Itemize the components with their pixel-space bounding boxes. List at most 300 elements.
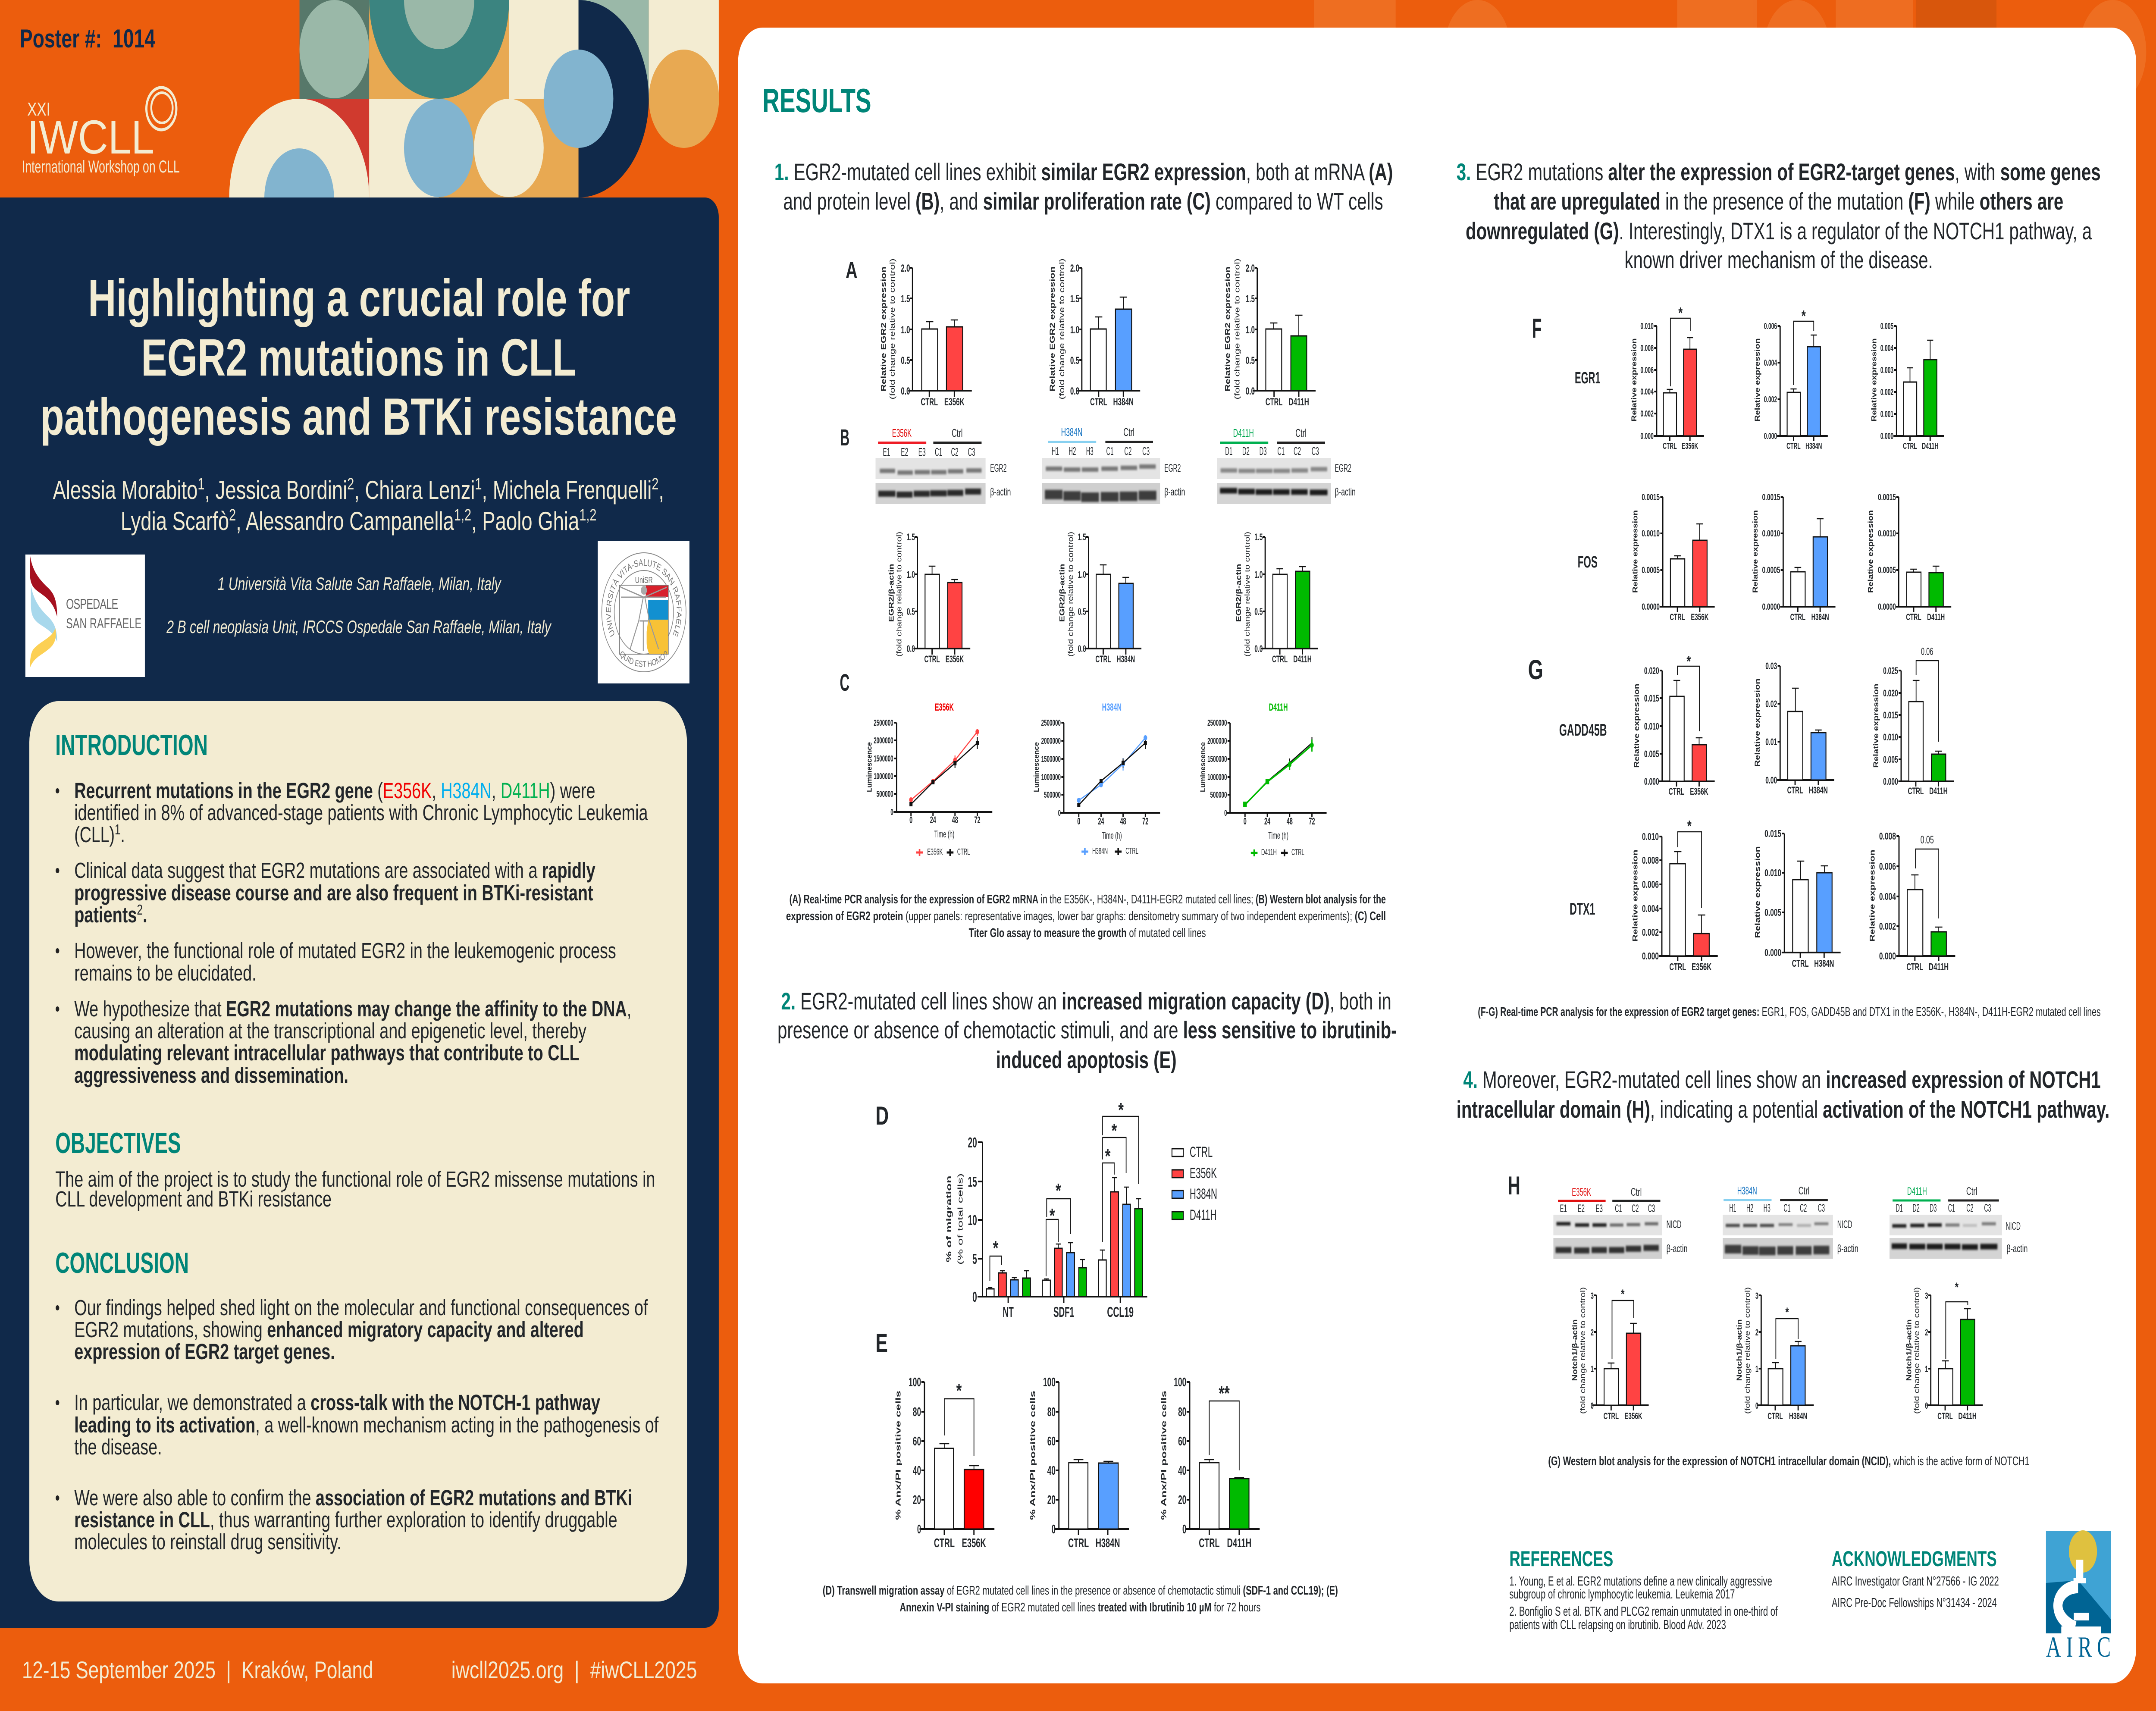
bar chart: EGR1 D411H: 0.005 bbox=[1880, 321, 1893, 331]
bar chart: EGR2 mRNA H384N: (fold change relative to control) bbox=[1058, 259, 1066, 399]
conclusion bullets: We were also able to confirm the association of EGR2 mutations and BTKi bbox=[74, 1486, 632, 1510]
bar chart: Notch1/β-actin H384N: 1 bbox=[1755, 1364, 1758, 1374]
footer: dates and website: iwcll2025.org | #iwCLL2025 bbox=[451, 1657, 697, 1684]
line chart: growth E356K: Time (h) bbox=[934, 830, 954, 840]
western blot: NICD D411H: C1 bbox=[1948, 1202, 1955, 1214]
bar chart: EGR1 H384N: H384N bbox=[1805, 441, 1822, 451]
bar chart: GADD45B H384N: 0.01 bbox=[1765, 737, 1777, 748]
caption: panels A-C bbox=[786, 893, 1386, 940]
western blot: NICD H384N: C3 bbox=[1818, 1202, 1825, 1214]
bar chart: apoptosis H384N: H384N bbox=[1096, 1536, 1120, 1550]
bar chart: DTX1 H384N: CTRL bbox=[1792, 958, 1809, 969]
western blot: NICD E356K: C3 bbox=[1648, 1202, 1655, 1215]
references list: 2. Bonfiglio S et al. BTK and PLCG2 remain unmutated in one-third of bbox=[1509, 1604, 1778, 1619]
bar chart: FOS D411H: 0.0000 bbox=[1878, 602, 1896, 612]
bar chart: EGR2 mRNA E356K: 1.0 bbox=[901, 324, 910, 336]
bar chart: EGR1 H384N: 0.004 bbox=[1764, 358, 1777, 368]
western blot: NICD H384N: H2 bbox=[1746, 1202, 1753, 1214]
bar chart: EGR2 mRNA H384N: H384N bbox=[1113, 396, 1134, 408]
line chart: growth H384N: 1500000 bbox=[1041, 754, 1061, 764]
logo: Ospedale San Raffaele bbox=[25, 555, 145, 677]
line chart: growth H384N: H384N bbox=[1092, 846, 1108, 856]
authors: , Michela Frenquelli bbox=[482, 476, 652, 505]
western blot: NICD D411H: C3 bbox=[1984, 1202, 1991, 1214]
bar chart: EGR2 mRNA D411H: Relative EGR2 expression bbox=[1224, 266, 1232, 392]
western blot: NICD D411H: D3 bbox=[1930, 1202, 1937, 1214]
western blot: EGR2 H384N: β-actin bbox=[1164, 486, 1185, 498]
gene label DTX1: DTX1 bbox=[1570, 899, 1595, 918]
iwCLL conference logo: International Workshop on CLL bbox=[22, 157, 180, 176]
affiliations: 1 Università Vita Salute San Raffaele, Milan, Italy bbox=[218, 573, 502, 594]
bar chart: FOS H384N: CTRL bbox=[1790, 612, 1805, 622]
bar chart: FOS H384N: 0.0010 bbox=[1762, 529, 1780, 539]
caption: panels D-E: Annexin V-PI staining of EGR2 mutated cell lines treated with Ibrutinib 10 µM for 72 hours bbox=[899, 1601, 1260, 1614]
bar chart: EGR1 E356K: CTRL bbox=[1663, 441, 1677, 451]
conclusion bullets: the disease. bbox=[74, 1435, 162, 1460]
bar chart: apoptosis D411H: % Anx/PI positive cells bbox=[1160, 1391, 1168, 1520]
introduction bullets: aggressiveness and dissemination. bbox=[74, 1063, 348, 1088]
bar chart: Notch1/β-actin D411H: Notch1/β-actin bbox=[1905, 1319, 1913, 1381]
bar chart: GADD45B E356K: 0.000 bbox=[1644, 777, 1659, 787]
panel: introduction, objectives, conclusion bbox=[29, 701, 687, 1601]
line chart: growth D411H: 2500000 bbox=[1207, 718, 1227, 728]
western blot: EGR2 D411H: D411H bbox=[1233, 427, 1254, 439]
line chart: growth D411H: 1500000 bbox=[1207, 754, 1227, 764]
bar chart: DTX1 D411H: 0.05 bbox=[1921, 834, 1934, 846]
references list bbox=[1509, 1573, 1778, 1632]
bar chart: EGR2/β-actin D411H: 1.5 bbox=[1254, 533, 1263, 543]
western blot: NICD E356K: Ctrl bbox=[1631, 1186, 1642, 1198]
bar chart: Notch1/β-actin D411H: 1 bbox=[1925, 1364, 1928, 1374]
western blot: EGR2 H384N: H384N bbox=[1061, 426, 1082, 439]
western blot: NICD H384N: NICD bbox=[1837, 1218, 1852, 1231]
bar chart: FOS D411H: 0.0010 bbox=[1878, 529, 1896, 539]
bar chart: EGR2/β-actin H384N: 0.0 bbox=[1078, 644, 1086, 655]
introduction bullets: identified in 8% of advanced-stage patients with Chronic Lymphocytic Leukemia bbox=[74, 801, 648, 825]
heading: references: REFERENCES bbox=[1509, 1547, 1613, 1571]
bar chart: Notch1/β-actin E356K: (fold change relative to control) bbox=[1579, 1287, 1587, 1414]
bar chart: EGR1 H384N: 0.006 bbox=[1764, 321, 1777, 331]
bar chart: EGR2/β-actin H384N: 1.5 bbox=[1078, 533, 1086, 543]
bar chart: FOS E356K bbox=[1631, 492, 1715, 622]
logo: Università Vita-Salute San Raffaele seal: QUID EST HOMO? bbox=[618, 649, 669, 669]
bar chart: migration: 15 bbox=[968, 1174, 977, 1190]
bar chart: EGR1 D411H: 0.001 bbox=[1880, 409, 1893, 419]
bar chart: apoptosis D411H: 0 bbox=[1182, 1523, 1186, 1536]
line chart: growth H384N: 500000 bbox=[1044, 790, 1061, 800]
bar chart: EGR1 D411H bbox=[1870, 321, 1944, 451]
finding 3 text: downregulated (G). Interestingly, DTX1 is a regulator of the NOTCH1 pathway, a bbox=[1466, 218, 2092, 245]
line chart: growth H384N: 48 bbox=[1120, 817, 1126, 827]
line chart: growth H384N: Luminescence bbox=[1032, 742, 1040, 792]
western blot: NICD E356K bbox=[1553, 1186, 1688, 1259]
caption: panels A-C: expression of EGR2 protein (upper panels: representative images, lower bar graphs: densitometry summary of two independent experiments); (C) Cell bbox=[786, 909, 1386, 923]
logo: AIRC bbox=[2046, 1530, 2111, 1663]
bar chart: EGR2/β-actin H384N bbox=[1058, 532, 1141, 665]
western blot: EGR2 H384N: EGR2 bbox=[1164, 462, 1181, 474]
western blot: EGR2 E356K: E2 bbox=[901, 446, 908, 458]
panel: results bbox=[738, 28, 2136, 1683]
gene label FOS: FOS bbox=[1578, 552, 1598, 571]
bar chart: GADD45B E356K: * bbox=[1686, 653, 1691, 670]
logo: Università Vita-Salute San Raffaele seal: UniSR bbox=[635, 575, 653, 585]
line chart: growth D411H: D411H bbox=[1269, 702, 1288, 713]
bar chart: FOS E356K: 0.0000 bbox=[1642, 602, 1660, 612]
bar chart: EGR2/β-actin D411H: 0.0 bbox=[1254, 644, 1263, 655]
western blot: NICD E356K: β-actin bbox=[1667, 1242, 1688, 1255]
line chart: growth E356K: 48 bbox=[952, 815, 958, 826]
bar chart: migration: % of migration bbox=[945, 1175, 953, 1263]
bar chart: Notch1/β-actin E356K: CTRL bbox=[1604, 1411, 1619, 1421]
bar chart: apoptosis D411H: 80 bbox=[1178, 1405, 1186, 1419]
bar chart: GADD45B D411H: 0.015 bbox=[1883, 711, 1898, 721]
western blot: EGR2 H384N: C2 bbox=[1124, 445, 1131, 458]
western blot: NICD H384N: C2 bbox=[1800, 1202, 1807, 1214]
bar chart: FOS E356K: Relative expression bbox=[1631, 510, 1639, 593]
bar chart: apoptosis D411H: ** bbox=[1219, 1383, 1230, 1404]
bar chart: Notch1/β-actin H384N bbox=[1735, 1287, 1814, 1421]
line chart: growth H384N: 2500000 bbox=[1041, 718, 1061, 728]
heading: acknowledgments: ACKNOWLEDGMENTS bbox=[1832, 1547, 1997, 1571]
bar chart: EGR2/β-actin H384N: H384N bbox=[1117, 655, 1135, 665]
legend: migration chart: E356K bbox=[1190, 1165, 1217, 1181]
bar chart: EGR2 mRNA H384N: 0.0 bbox=[1070, 385, 1079, 397]
bar chart: Notch1/β-actin D411H: * bbox=[1955, 1279, 1959, 1294]
bar chart: GADD45B D411H: CTRL bbox=[1908, 787, 1924, 797]
bar chart: DTX1 E356K: 0.008 bbox=[1642, 855, 1659, 866]
western blot: NICD H384N: H3 bbox=[1764, 1202, 1771, 1214]
logo: Università Vita-Salute San Raffaele seal bbox=[598, 541, 689, 683]
bar chart: GADD45B E356K: CTRL bbox=[1669, 787, 1685, 797]
bar chart: GADD45B D411H: 0.06 bbox=[1921, 646, 1933, 658]
bar chart: GADD45B E356K: E356K bbox=[1690, 787, 1708, 797]
authors: 1 bbox=[197, 474, 204, 493]
bar chart: EGR2 mRNA H384N: CTRL bbox=[1090, 396, 1107, 408]
bar chart: apoptosis E356K: 100 bbox=[909, 1376, 921, 1389]
western blot: EGR2 H384N: H1 bbox=[1052, 445, 1059, 458]
authors: Alessia Morabito bbox=[53, 476, 188, 505]
western blot: EGR2 D411H bbox=[1217, 427, 1356, 504]
line chart: growth H384N: 0 bbox=[1077, 817, 1080, 827]
line chart: growth E356K: E356K bbox=[927, 847, 943, 857]
bar chart: Notch1/β-actin H384N: * bbox=[1785, 1304, 1789, 1319]
western blot: NICD D411H: D411H bbox=[1907, 1185, 1927, 1197]
line chart: growth D411H: Time (h) bbox=[1268, 831, 1288, 841]
western blot: NICD H384N: C1 bbox=[1783, 1202, 1791, 1214]
bar chart: DTX1 H384N: 0.005 bbox=[1764, 907, 1781, 918]
line chart: growth D411H: 24 bbox=[1264, 817, 1270, 827]
bar chart: EGR2 mRNA E356K: 0.0 bbox=[901, 385, 910, 397]
panel letter C: C bbox=[840, 669, 849, 696]
line chart: growth D411H: CTRL bbox=[1291, 847, 1304, 857]
bar chart: FOS H384N: H384N bbox=[1811, 612, 1829, 622]
western blot: EGR2 D411H: D3 bbox=[1260, 445, 1267, 458]
bar chart: Notch1/β-actin D411H: 2 bbox=[1925, 1328, 1928, 1338]
bar chart: EGR1 H384N: Relative expression bbox=[1753, 338, 1761, 422]
bar chart: FOS D411H: 0.0015 bbox=[1878, 492, 1896, 502]
acknowledgments list bbox=[1832, 1573, 1999, 1610]
bar chart: apoptosis E356K: % Anx/PI positive cells bbox=[894, 1391, 903, 1520]
decorative geometric header pattern bbox=[229, 0, 719, 197]
bar chart: apoptosis H384N: 0 bbox=[1052, 1523, 1056, 1536]
finding 3 text: known driver mechanism of the disease. bbox=[1625, 247, 1933, 274]
bar chart: EGR2/β-actin D411H: (fold change relative to control) bbox=[1243, 532, 1251, 657]
references list: subgroup of chronic lymphocytic leukemia. Leukemia 2017 bbox=[1509, 1586, 1735, 1601]
bar chart: apoptosis H384N: 80 bbox=[1047, 1405, 1056, 1419]
bar chart: GADD45B D411H bbox=[1872, 646, 1954, 797]
bar chart: EGR1 D411H: D411H bbox=[1922, 441, 1938, 451]
panel letter B: B bbox=[840, 425, 849, 451]
bar chart: apoptosis H384N: 60 bbox=[1047, 1435, 1056, 1448]
logo: Ospedale San Raffaele: SAN RAFFAELE bbox=[66, 616, 142, 632]
line chart: growth H384N: 72 bbox=[1142, 817, 1148, 827]
introduction bullets: progressive disease course and are also frequent in BTKi-resistant bbox=[74, 881, 593, 906]
bar chart: DTX1 E356K: 0.006 bbox=[1642, 879, 1659, 890]
western blot: NICD E356K: C2 bbox=[1632, 1202, 1639, 1215]
acknowledgments list: AIRC Pre-Doc Fellowships N°31434 - 2024 bbox=[1832, 1595, 1997, 1610]
bar chart: GADD45B H384N: 0.02 bbox=[1765, 699, 1777, 710]
introduction bullets bbox=[56, 779, 648, 1088]
authors: , Jessica Bordini bbox=[204, 476, 347, 505]
bar chart: EGR1 H384N bbox=[1753, 307, 1828, 451]
bar chart: EGR2/β-actin E356K: 0.0 bbox=[907, 644, 915, 655]
line chart: growth E356K: 2000000 bbox=[874, 736, 893, 746]
bar chart: migration: 5 bbox=[972, 1251, 977, 1267]
bar chart: apoptosis H384N: % Anx/PI positive cells bbox=[1029, 1391, 1037, 1520]
bar chart: GADD45B H384N bbox=[1753, 661, 1834, 796]
bar chart: EGR2 mRNA D411H: (fold change relative to control) bbox=[1233, 259, 1241, 399]
bar chart: GADD45B E356K: 0.005 bbox=[1644, 749, 1659, 760]
bar chart: EGR2/β-actin D411H: 1.0 bbox=[1254, 570, 1263, 580]
heading: conclusion: CONCLUSION bbox=[55, 1247, 189, 1279]
bar chart: EGR1 E356K: 0.006 bbox=[1640, 365, 1654, 375]
line chart: growth E356K: Luminescence bbox=[865, 742, 873, 792]
line chart: growth D411H: 2000000 bbox=[1207, 736, 1227, 746]
western blot: EGR2 D411H: Ctrl bbox=[1295, 427, 1307, 439]
bar chart: GADD45B E356K bbox=[1633, 653, 1715, 797]
panel letter F: F bbox=[1532, 313, 1542, 344]
bar chart: DTX1 D411H: D411H bbox=[1929, 962, 1949, 973]
authors: , Alessandro Campanella bbox=[236, 507, 454, 536]
bar chart: EGR2/β-actin H384N: (fold change relative to control) bbox=[1067, 532, 1075, 657]
line chart: growth D411H: 1000000 bbox=[1207, 772, 1227, 782]
bar chart: DTX1 E356K: * bbox=[1687, 818, 1692, 835]
bar chart: EGR2 mRNA D411H bbox=[1224, 259, 1316, 408]
western blot: EGR2 E356K: E3 bbox=[918, 446, 926, 458]
western blot: EGR2 D411H: C1 bbox=[1277, 445, 1285, 458]
authors: , Chiara Lenzi bbox=[354, 476, 475, 505]
bar chart: EGR2/β-actin E356K: 1.0 bbox=[907, 570, 915, 580]
poster number: Poster #: 1014 bbox=[20, 25, 155, 53]
line chart: growth H384N: 0 bbox=[1058, 808, 1061, 818]
bar chart: GADD45B D411H: 0.005 bbox=[1883, 755, 1898, 765]
bar chart: EGR1 H384N: 0.002 bbox=[1764, 395, 1777, 404]
western blot: EGR2 H384N: H3 bbox=[1086, 445, 1094, 458]
bar chart: apoptosis E356K: 60 bbox=[913, 1435, 921, 1448]
authors: 2 bbox=[347, 474, 354, 493]
line chart: growth D411H: 0 bbox=[1244, 817, 1247, 827]
finding 3 text bbox=[1457, 159, 2101, 274]
bar chart: EGR1 E356K: 0.010 bbox=[1640, 321, 1654, 331]
bar chart: FOS E356K: 0.0005 bbox=[1642, 565, 1660, 575]
bar chart: EGR1 E356K bbox=[1630, 304, 1704, 451]
bar chart: Notch1/β-actin D411H: CTRL bbox=[1937, 1411, 1953, 1421]
line chart: growth E356K: 2500000 bbox=[874, 718, 893, 728]
western blot: EGR2 D411H: β-actin bbox=[1335, 486, 1356, 498]
bar chart: DTX1 E356K: 0.010 bbox=[1642, 831, 1659, 843]
caption: panels D-E bbox=[823, 1584, 1338, 1614]
western blot: NICD E356K: C1 bbox=[1615, 1202, 1622, 1215]
bar chart: Notch1/β-actin D411H: (fold change relative to control) bbox=[1913, 1287, 1921, 1414]
finding 4 text: 4. Moreover, EGR2-mutated cell lines show an increased expression of NOTCH1 bbox=[1463, 1066, 2101, 1094]
bar chart: EGR2 mRNA H384N: 2.0 bbox=[1070, 263, 1079, 274]
western blot: EGR2 D411H: C3 bbox=[1312, 445, 1319, 458]
bar chart: migration: * bbox=[1118, 1100, 1124, 1121]
bar chart: FOS D411H bbox=[1867, 492, 1951, 622]
bar chart: FOS H384N: Relative expression bbox=[1751, 510, 1759, 593]
bar chart: FOS D411H: CTRL bbox=[1906, 612, 1921, 622]
authors: 1,2 bbox=[579, 505, 596, 524]
western blot: NICD D411H: D2 bbox=[1913, 1202, 1920, 1214]
bar chart: EGR2/β-actin E356K bbox=[887, 532, 970, 665]
line chart: growth D411H: 48 bbox=[1287, 817, 1293, 827]
western blot: NICD H384N: H1 bbox=[1729, 1202, 1736, 1214]
bar chart: DTX1 H384N: H384N bbox=[1814, 958, 1834, 969]
western blot: NICD E356K: E1 bbox=[1560, 1202, 1567, 1215]
bar chart: FOS H384N: 0.0000 bbox=[1762, 602, 1780, 612]
bar chart: migration: 10 bbox=[968, 1213, 977, 1228]
introduction bullets: modulating relevant intracellular pathways that contribute to CLL bbox=[74, 1041, 580, 1065]
bar chart: EGR2/β-actin H384N: 0.5 bbox=[1078, 607, 1086, 617]
heading: results: RESULTS bbox=[762, 82, 871, 119]
bar chart: DTX1 E356K: 0.000 bbox=[1642, 951, 1659, 962]
bar chart: EGR2/β-actin E356K: 1.5 bbox=[907, 533, 915, 543]
bar chart: migration: * bbox=[1056, 1180, 1061, 1202]
bar chart: EGR2 mRNA E356K: E356K bbox=[944, 396, 965, 408]
bar chart: migration: * bbox=[993, 1238, 999, 1259]
finding 2 text: presence or absence of chemotactic stimuli, and are less sensitive to ibrutinib- bbox=[777, 1017, 1397, 1044]
bar chart: migration: SDF1 bbox=[1053, 1304, 1074, 1320]
bar chart: DTX1 H384N: 0.015 bbox=[1764, 828, 1781, 840]
western blot: EGR2 H384N: H2 bbox=[1069, 445, 1076, 458]
introduction bullets: 2 bbox=[137, 902, 143, 918]
western blot: EGR2 E356K: C3 bbox=[968, 446, 975, 458]
bar chart: GADD45B D411H: D411H bbox=[1929, 787, 1948, 797]
bar chart: FOS E356K: CTRL bbox=[1670, 612, 1685, 622]
bar chart: EGR2 mRNA D411H: 0.5 bbox=[1246, 355, 1255, 367]
bar chart: migration: 20 bbox=[968, 1135, 977, 1151]
bar chart: apoptosis D411H: 40 bbox=[1178, 1464, 1186, 1478]
panel: title and authors bbox=[0, 197, 719, 1628]
bar chart: EGR1 D411H: Relative expression bbox=[1870, 338, 1878, 422]
line chart: growth E356K: 72 bbox=[974, 815, 981, 826]
caption: panels A-C: Titer Glo assay to measure the growth of mutated cell lines bbox=[969, 926, 1206, 940]
caption: panel H: (G) Western blot analysis for the expression of NOTCH1 intracellular domain (NCID), which is the active form of NOTCH1 bbox=[1548, 1454, 2030, 1468]
bar chart: EGR2/β-actin E356K: E356K bbox=[946, 655, 964, 665]
bar chart: EGR1 E356K: 0.004 bbox=[1640, 387, 1654, 397]
finding 2 text: induced apoptosis (E) bbox=[996, 1047, 1177, 1074]
heading: introduction: INTRODUCTION bbox=[55, 729, 208, 761]
line chart: growth D411H: 0 bbox=[1224, 808, 1227, 818]
heading: objectives: OBJECTIVES bbox=[55, 1127, 181, 1159]
bar chart: Notch1/β-actin H384N: H384N bbox=[1789, 1411, 1807, 1421]
bar chart: EGR2 mRNA E356K: Relative EGR2 expression bbox=[880, 266, 888, 392]
bar chart: apoptosis H384N: 100 bbox=[1043, 1376, 1056, 1389]
conclusion bullets bbox=[56, 1296, 659, 1554]
line chart: growth E356K: 24 bbox=[930, 815, 936, 826]
bar chart: GADD45B H384N: H384N bbox=[1809, 786, 1828, 796]
bar chart: GADD45B D411H: 0.020 bbox=[1883, 689, 1898, 699]
legend: migration chart bbox=[1172, 1144, 1217, 1223]
introduction bullets: 1 bbox=[115, 822, 120, 838]
bar chart: DTX1 D411H: Relative expression bbox=[1868, 849, 1876, 942]
bar chart: apoptosis E356K: 20 bbox=[913, 1493, 921, 1507]
bar chart: GADD45B E356K: Relative expression bbox=[1633, 684, 1641, 768]
bar chart: EGR1 H384N: CTRL bbox=[1786, 441, 1801, 451]
title: EGR2 mutations in CLL bbox=[141, 328, 577, 387]
bar chart: DTX1 H384N: 0.010 bbox=[1764, 868, 1781, 879]
bar chart: EGR2/β-actin H384N: CTRL bbox=[1095, 655, 1111, 665]
bar chart: EGR1 D411H: CTRL bbox=[1903, 441, 1917, 451]
line chart: growth H384N: 24 bbox=[1098, 817, 1104, 827]
bar chart: EGR1 E356K: E356K bbox=[1682, 441, 1698, 451]
introduction bullets: patients bbox=[74, 903, 134, 928]
line chart: growth D411H: 500000 bbox=[1210, 790, 1227, 800]
bar chart: FOS D411H: 0.0005 bbox=[1878, 565, 1896, 575]
line chart: growth H384N bbox=[1032, 702, 1160, 856]
introduction bullets: remains to be elucidated. bbox=[74, 961, 257, 986]
bar chart: EGR2/β-actin D411H: D411H bbox=[1293, 655, 1312, 665]
bar chart: EGR2 mRNA E356K bbox=[880, 259, 972, 408]
bar chart: migration: (% of total cells) bbox=[956, 1173, 965, 1265]
western blot: EGR2 E356K: C2 bbox=[951, 446, 959, 458]
bar chart: EGR1 D411H: 0.002 bbox=[1880, 387, 1893, 397]
panel letter E: E bbox=[875, 1329, 888, 1358]
bar chart: FOS H384N: 0.0015 bbox=[1762, 492, 1780, 502]
bar chart: DTX1 E356K: E356K bbox=[1692, 962, 1712, 973]
bar chart: apoptosis E356K: 40 bbox=[913, 1464, 921, 1478]
bar chart: FOS E356K: E356K bbox=[1691, 612, 1708, 622]
bar chart: Notch1/β-actin H384N: CTRL bbox=[1767, 1411, 1783, 1421]
panel letter A: A bbox=[846, 257, 858, 283]
line chart: growth H384N: CTRL bbox=[1125, 846, 1138, 856]
bar chart: DTX1 H384N bbox=[1754, 828, 1841, 969]
bar chart: FOS E356K: 0.0010 bbox=[1642, 529, 1660, 539]
introduction bullets: Clinical data suggest that EGR2 mutations are associated with a rapidly bbox=[74, 859, 595, 883]
western blot: NICD D411H: D1 bbox=[1896, 1202, 1903, 1214]
line chart: growth E356K: 1500000 bbox=[874, 754, 893, 764]
objectives text: CLL development and BTKi resistance bbox=[55, 1187, 332, 1212]
bar chart: apoptosis D411H: CTRL bbox=[1199, 1536, 1219, 1550]
bar chart: DTX1 D411H: 0.008 bbox=[1879, 831, 1896, 842]
bar chart: GADD45B H384N: Relative expression bbox=[1753, 678, 1761, 767]
authors: 1 bbox=[475, 474, 482, 493]
conclusion bullets: EGR2 mutations, showing enhanced migratory capacity and altered bbox=[74, 1318, 584, 1342]
line chart: growth E356K bbox=[865, 702, 992, 857]
bar chart: EGR2 mRNA H384N: 1.5 bbox=[1070, 293, 1079, 305]
western blot: NICD H384N: Ctrl bbox=[1799, 1185, 1809, 1197]
bar chart: GADD45B D411H: 0.000 bbox=[1883, 777, 1898, 787]
finding 3 text: that are upregulated in the presence of the mutation (F) while others are bbox=[1494, 188, 2063, 215]
line chart: growth E356K: CTRL bbox=[957, 847, 970, 857]
bar chart: GADD45B H384N: 0.00 bbox=[1765, 776, 1777, 786]
authors: , bbox=[658, 476, 664, 505]
logo: AIRC: AIRC bbox=[2046, 1630, 2111, 1663]
bar chart: DTX1 E356K: 0.004 bbox=[1642, 903, 1659, 915]
bar chart: DTX1 E356K: Relative expression bbox=[1631, 849, 1639, 942]
bar chart: migration: NT bbox=[1003, 1304, 1014, 1320]
conclusion bullets: Our findings helped shed light on the molecular and functional consequences of bbox=[74, 1296, 648, 1320]
